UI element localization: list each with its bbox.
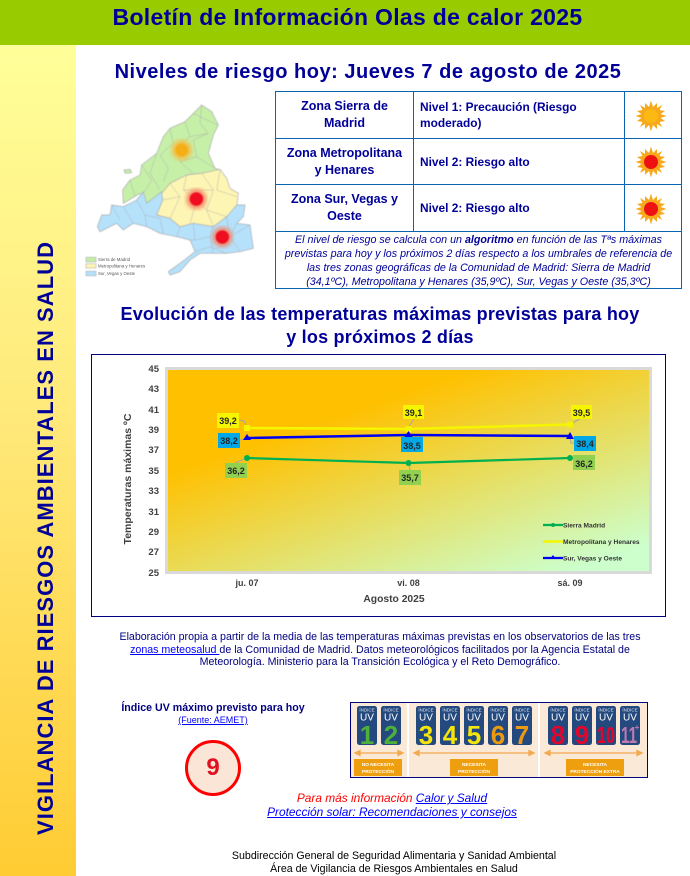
- data labels: 39,1: [405, 408, 422, 418]
- data labels: 39,5: [573, 408, 590, 418]
- UV scale graphic: UV: [551, 712, 565, 724]
- icon: red sun: [636, 194, 666, 224]
- zone name: Sur: Oeste: [327, 209, 362, 223]
- UV scale graphic: 6: [491, 720, 505, 750]
- zone name: Sur: Zona Sur, Vegas y: [291, 192, 398, 206]
- risk table: [275, 91, 682, 289]
- y axis labels: 35: [148, 466, 160, 477]
- y axis labels: 25: [148, 568, 160, 579]
- map of risk zones: Metropolitana y Henares: [98, 264, 145, 269]
- UV scale graphic: ÍNDICE: [550, 706, 566, 712]
- legend: Metropolitana y Henares: [563, 539, 640, 546]
- UV scale graphic: UV: [575, 712, 589, 724]
- data labels: [217, 405, 596, 485]
- UV scale graphic: UV: [491, 712, 505, 724]
- more info links: Protección solar: Recomendaciones y consejos: [267, 805, 517, 819]
- UV scale graphic: 1: [360, 720, 374, 750]
- series: Sierra Madrid: [244, 455, 573, 466]
- UV scale graphic: 8: [551, 720, 565, 750]
- UV scale graphic: UV: [467, 712, 481, 724]
- footer: [232, 850, 556, 875]
- UV scale graphic: ÍNDICE: [622, 706, 638, 712]
- zone name: Sierra: [301, 99, 388, 130]
- zone name: Metropolitana: [287, 146, 402, 176]
- UV scale graphic: UV: [360, 712, 374, 724]
- UV scale graphic: UV: [515, 712, 529, 724]
- risk method note: [284, 234, 672, 288]
- y axis labels: 37: [148, 445, 159, 456]
- data source note: [119, 631, 641, 668]
- legend: Sur, Vegas y Oeste: [563, 556, 622, 562]
- series: Sur, Vegas y Oeste: [243, 431, 574, 440]
- zone name: Metropolitana: Zona Metropolitana: [287, 146, 402, 160]
- data labels: 38,2: [220, 436, 238, 446]
- zone name: Sierra: Zona Sierra de: [301, 99, 388, 113]
- heading: temperature evolution: [120, 304, 640, 347]
- legend: [543, 522, 640, 562]
- UV heading: Índice UV máximo previsto para hoy: [121, 702, 305, 714]
- risk method note: El nivel de riesgo se calcula con un algoritmo en función de las Tªs máximas: [295, 234, 662, 246]
- UV scale graphic: PROTECCIÓN: [362, 767, 395, 775]
- x axis labels: vi. 08: [397, 578, 420, 588]
- UV scale graphic: +: [635, 723, 640, 732]
- UV scale graphic: UV: [599, 712, 613, 724]
- y axis labels: 33: [148, 486, 159, 497]
- UV scale graphic: ÍNDICE: [574, 706, 590, 712]
- level: Sierra: [420, 100, 577, 130]
- x axis title: Agosto 2025: [363, 594, 425, 605]
- level: Sierra: Nivel 1: Precaución (Riesgo: [420, 100, 577, 114]
- UV value circle: [185, 740, 241, 796]
- side vertical title: VIGILANCIA DE RIESGOS AMBIENTALES EN SALUD: [33, 242, 58, 835]
- data labels: 36,2: [227, 466, 245, 476]
- x axis labels: sá. 09: [557, 578, 583, 588]
- y axis labels: 27: [148, 547, 159, 558]
- y axis labels: 43: [148, 384, 159, 395]
- risk method note: previstas para hoy y los próximos 2 días respecto a los umbrales de referencia de: [285, 248, 672, 260]
- UV scale graphic: ÍNDICE: [598, 706, 614, 712]
- UV scale graphic: 11: [621, 722, 637, 748]
- data labels: 39,2: [219, 416, 237, 426]
- title: Boletín de Información Olas de calor 2025: [113, 4, 582, 30]
- y axis labels: 31: [148, 507, 160, 518]
- map of risk zones: [85, 104, 254, 276]
- data labels: 35,7: [401, 473, 419, 483]
- icon: orange sun: [636, 100, 666, 132]
- zone name: Sierra: Madrid: [324, 116, 365, 130]
- level: Metropolitana: Nivel 2: Riesgo alto: [420, 154, 530, 168]
- UV scale graphic: ÍNDICE: [466, 706, 482, 712]
- data source note: Elaboración propia a partir de la media de las temperaturas máximas previstas en los observatorios de las tres: [119, 631, 641, 643]
- UV value circle: 9: [206, 754, 220, 781]
- UV scale graphic: 5: [467, 720, 481, 750]
- UV scale graphic: UV: [419, 712, 433, 724]
- UV scale graphic: 10: [597, 722, 615, 748]
- zone name: Sur: [291, 192, 398, 223]
- map of risk zones: Sierra de Madrid: [98, 257, 131, 262]
- y axis labels: 29: [148, 527, 159, 538]
- UV scale graphic: UV: [443, 712, 457, 724]
- UV source link: (Fuente: AEMET): [178, 715, 248, 725]
- side band: [0, 45, 76, 876]
- data labels: 36,2: [575, 459, 593, 469]
- heading: temperature evolution: y los próximos 2 días: [286, 327, 474, 347]
- header band: [0, 0, 690, 45]
- heading: temperature evolution: Evolución de las temperaturas máximas previstas para hoy: [120, 304, 639, 324]
- more info links: [267, 791, 517, 819]
- UV scale graphic: 9: [575, 720, 589, 750]
- icon: red sun: [636, 146, 666, 178]
- y axis labels: 41: [148, 405, 160, 416]
- UV scale graphic: 3: [419, 720, 433, 750]
- series: Metropolitana y Henares: [244, 422, 573, 432]
- x axis labels: [234, 578, 583, 588]
- UV scale graphic: 7: [515, 720, 529, 750]
- UV scale graphic: NECESITA: [583, 762, 607, 768]
- y axis labels: 45: [148, 364, 160, 375]
- data source note: Meteorología. Ministerio para la Transición Ecológica y el Reto Demográfico.: [200, 656, 560, 668]
- UV scale graphic: PROTECCIÓN: [458, 767, 491, 775]
- level: Sierra: moderado): [420, 116, 481, 130]
- zone name: Metropolitana: y Henares: [315, 162, 374, 176]
- UV scale graphic: ÍNDICE: [418, 706, 434, 712]
- more info links: Para más información Calor y Salud: [297, 791, 487, 805]
- UV scale graphic: UV: [623, 712, 637, 724]
- UV scale graphic: PROTECCIÓN EXTRA: [570, 767, 620, 775]
- UV scale graphic: [350, 702, 648, 778]
- UV scale graphic: ÍNDICE: [490, 706, 506, 712]
- x axis labels: ju. 07: [234, 578, 259, 588]
- UV scale graphic: UV: [384, 712, 398, 724]
- y axis labels: [148, 364, 160, 579]
- footer: Área de Vigilancia de Riesgos Ambientales en Salud: [270, 863, 518, 875]
- UV scale graphic: ÍNDICE: [442, 706, 458, 712]
- UV scale graphic: ÍNDICE: [383, 706, 399, 712]
- level: Sur: Nivel 2: Riesgo alto: [420, 201, 530, 215]
- risk method note: (34,1ºC), Metropolitana y Henares (35,9ºC), Sur, Vegas y Oeste (35,3ºC): [306, 276, 651, 288]
- UV scale graphic: ÍNDICE: [514, 706, 530, 712]
- footer: Subdirección General de Seguridad Alimentaria y Sanidad Ambiental: [232, 850, 556, 862]
- heading: risk levels: Niveles de riesgo hoy: Jueves 7 de agosto de 2025: [115, 61, 621, 83]
- UV scale graphic: NECESITA: [462, 762, 486, 768]
- leader lines: [235, 419, 580, 470]
- UV scale graphic: ÍNDICE: [359, 706, 375, 712]
- UV scale graphic: NO NECESITA: [362, 762, 395, 768]
- legend: Sierra Madrid: [563, 522, 605, 530]
- data source note: zonas meteosalud de la Comunidad de Madrid. Datos meteorológicos facilitados por la Agencia Estatal de: [130, 644, 630, 656]
- data labels: 38,5: [403, 441, 421, 451]
- line chart: [91, 354, 666, 617]
- map of risk zones: Sur, Vegas y Oeste: [98, 271, 136, 276]
- risk method note: las tres zonas geográficas de la Comunidad de Madrid: Sierra de Madrid: [307, 262, 650, 274]
- UV scale graphic: 2: [384, 720, 398, 750]
- data labels: 38,4: [576, 439, 594, 449]
- y axis labels: 39: [148, 425, 159, 436]
- UV scale graphic: 4: [443, 720, 458, 750]
- y axis title: Temperaturas máximas ºC: [122, 413, 134, 544]
